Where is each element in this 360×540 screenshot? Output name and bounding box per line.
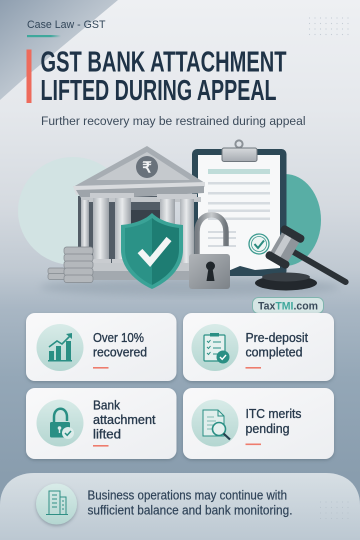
watermark badge: TaxTMI.com: [252, 298, 324, 314]
blob: left teal: [18, 157, 128, 265]
icon: open lock with check: [36, 400, 84, 446]
kicker underline: [27, 35, 61, 37]
accent dash: [246, 367, 261, 369]
icon: gavel: [255, 224, 358, 300]
text: Bank: [93, 398, 120, 412]
kicker label: Case Law - GST: [27, 19, 106, 31]
accent dash: [93, 367, 108, 369]
subtitle: Further recovery may be restrained during appeal: [41, 114, 306, 128]
hero illustration: [18, 140, 358, 300]
text: sufficient balance and bank monitoring.: [88, 504, 292, 518]
title accent bar: [26, 50, 32, 103]
icon: shield with check: [121, 213, 183, 289]
background dots: [305, 13, 351, 37]
background dots right: [320, 497, 350, 521]
text: [246, 406, 302, 436]
icon: office building: [36, 484, 77, 524]
panel: over 10% recovered: [26, 313, 176, 381]
icon: growth chart: [36, 324, 84, 371]
text: recovered: [93, 344, 147, 360]
title: [40, 47, 287, 107]
text: [246, 330, 308, 360]
text: [93, 330, 147, 360]
panel: bank attachment lifted: [26, 388, 176, 459]
accent dash: [246, 444, 261, 445]
text: [93, 398, 156, 442]
icon: document magnifier: [192, 400, 238, 446]
icon: clipboard document: [192, 140, 286, 276]
background corner shade: [0, 0, 118, 100]
icon: bank building: [73, 146, 205, 280]
icon: coin stacks: [48, 247, 93, 282]
panel: pre-deposit completed: [183, 313, 334, 381]
text: [88, 488, 292, 518]
text: Over 10%: [93, 330, 144, 345]
panel: ITC merits pending: [183, 388, 334, 459]
text: completed: [246, 344, 302, 360]
accent dash: [93, 445, 108, 447]
blob: right teal: [249, 174, 321, 266]
panel: business operations: [0, 473, 360, 540]
icon: bank building: ₹: [142, 160, 152, 176]
text: ITC merits: [246, 406, 302, 421]
text: Business operations may continue with: [88, 488, 287, 502]
icon: checklist: [192, 324, 238, 371]
text: lifted: [93, 426, 121, 442]
text: Pre-deposit: [246, 330, 308, 345]
watermark badge: TaxTMI.com: TaxTMI.com: [258, 300, 318, 312]
icon: open padlock: [189, 215, 230, 289]
ground shadow: [40, 278, 340, 296]
text: attachment: [93, 412, 156, 427]
text: pending: [246, 421, 290, 436]
header: [26, 19, 306, 128]
